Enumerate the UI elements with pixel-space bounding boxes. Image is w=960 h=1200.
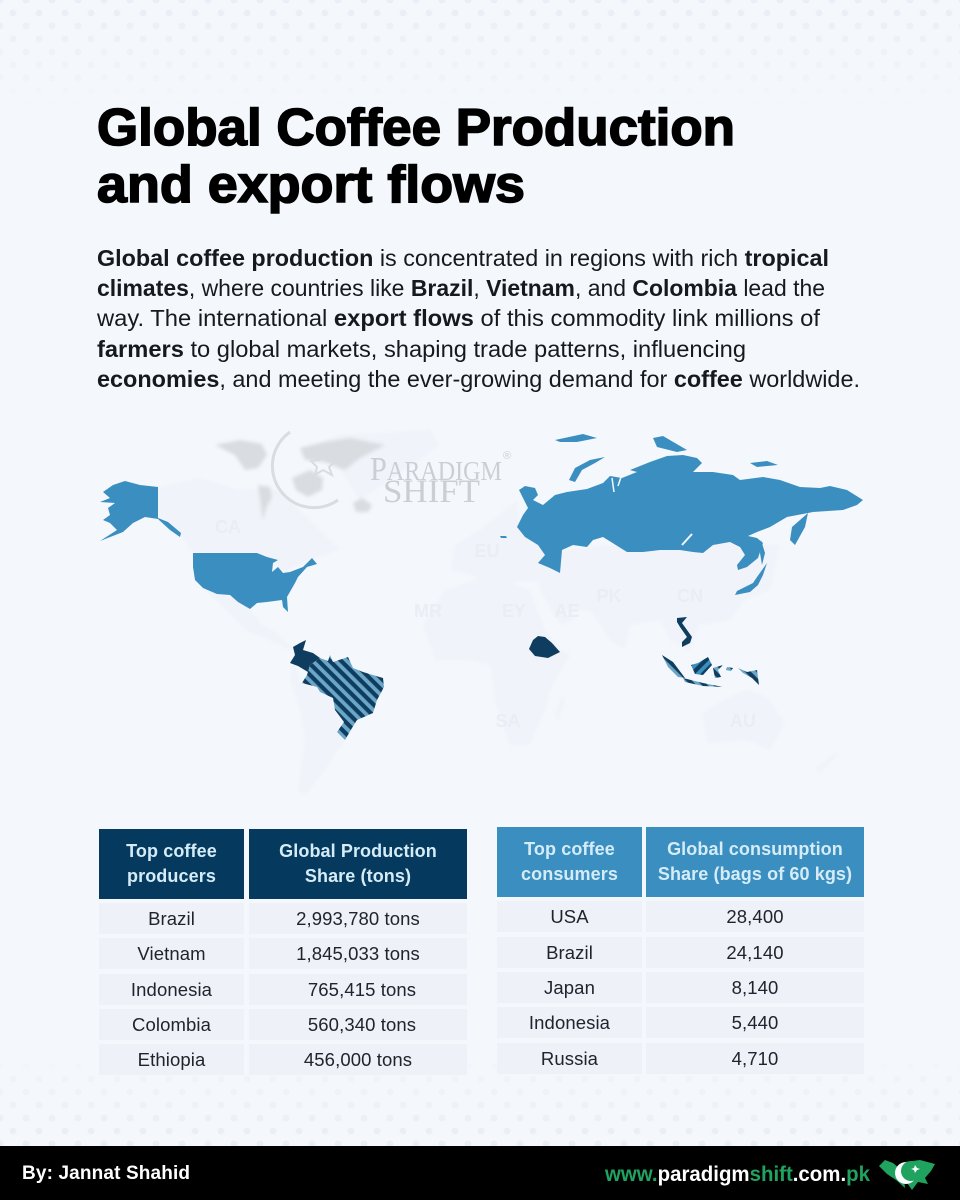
text: 456,000 tons	[304, 1048, 412, 1070]
watermark logo: PARADIGM	[370, 451, 502, 488]
text: 24,140	[726, 942, 784, 962]
author credit: By: Jannat Shahid	[22, 1163, 190, 1184]
country labels: CN	[677, 586, 703, 606]
text: 28,400	[726, 906, 784, 926]
country labels: SA	[495, 711, 521, 731]
production share header: Share (tons)	[305, 866, 411, 886]
text: 560,340 tons	[308, 1014, 416, 1034]
producers header: producers	[127, 866, 216, 886]
producers header	[99, 829, 244, 899]
country labels: EU	[474, 541, 500, 561]
consumption share header: Global consumption	[667, 839, 843, 859]
text: Brazil	[546, 942, 593, 962]
footer bar	[0, 1146, 960, 1200]
watermark logo	[215, 432, 511, 521]
text: 8,140	[732, 976, 778, 998]
text: Indonesia	[529, 1012, 610, 1032]
producers and consumers: Brazil	[302, 655, 384, 740]
country labels: PK	[596, 586, 622, 606]
consumers: Russia and Japan	[500, 434, 863, 595]
country labels: EY	[502, 601, 526, 621]
consumers header: consumers	[521, 864, 618, 884]
intro paragraph: economies, and meeting the ever-growing demand for coffee worldwide.	[97, 366, 860, 392]
consumers: USA	[100, 481, 317, 612]
consumption share header	[646, 827, 864, 897]
title: and export flows	[97, 156, 525, 214]
country labels: CA	[215, 517, 241, 537]
intro paragraph	[96, 245, 860, 392]
text: 765,415 tons	[308, 978, 416, 1000]
production share header	[249, 829, 467, 899]
text: Indonesia	[131, 978, 212, 1000]
table: top coffee producers	[99, 829, 467, 1070]
world map	[100, 431, 863, 740]
text: USA	[550, 906, 589, 926]
intro paragraph: climates, where countries like Brazil, Vietnam, and Colombia lead the	[97, 275, 825, 301]
text: Russia	[541, 1048, 598, 1068]
title	[97, 99, 735, 214]
country labels	[215, 517, 756, 731]
country labels: AU	[730, 711, 756, 731]
consumption share header: Share (bags of 60 kgs)	[658, 864, 852, 884]
production share header: Global Production	[279, 841, 437, 861]
text: Ethiopia	[138, 1048, 205, 1070]
text: Vietnam	[137, 942, 206, 964]
text: 5,440	[732, 1012, 778, 1032]
icon: green globe with crescent	[879, 1160, 935, 1190]
text: 1,845,033 tons	[296, 942, 420, 964]
table: top coffee consumers	[497, 827, 864, 1068]
producers: Colombia, Vietnam, Ethiopia	[290, 617, 692, 672]
watermark logo: SHIFT	[383, 474, 480, 510]
text: Colombia	[132, 1014, 211, 1034]
intro paragraph: farmers to global markets, shaping trade patterns, influencing	[97, 336, 746, 362]
website url: www.paradigmshift.com.pk	[604, 1163, 870, 1186]
country labels: MR	[414, 601, 442, 621]
producers and consumers: Indonesia	[662, 655, 759, 687]
text: Japan	[544, 976, 595, 998]
country labels: AE	[554, 601, 580, 621]
intro paragraph: Global coffee production is concentrated in regions with rich tropical	[97, 245, 829, 271]
title: Global Coffee Production	[97, 99, 735, 157]
intro paragraph: way. The international export flows of this commodity link millions of	[96, 305, 820, 331]
producers header: Top coffee	[126, 841, 217, 861]
watermark logo: ®	[503, 450, 511, 462]
consumers header	[497, 827, 642, 897]
text: 2,993,780 tons	[296, 908, 420, 928]
consumers header: Top coffee	[524, 839, 615, 859]
text: 4,710	[732, 1048, 778, 1068]
text: Brazil	[148, 908, 195, 928]
